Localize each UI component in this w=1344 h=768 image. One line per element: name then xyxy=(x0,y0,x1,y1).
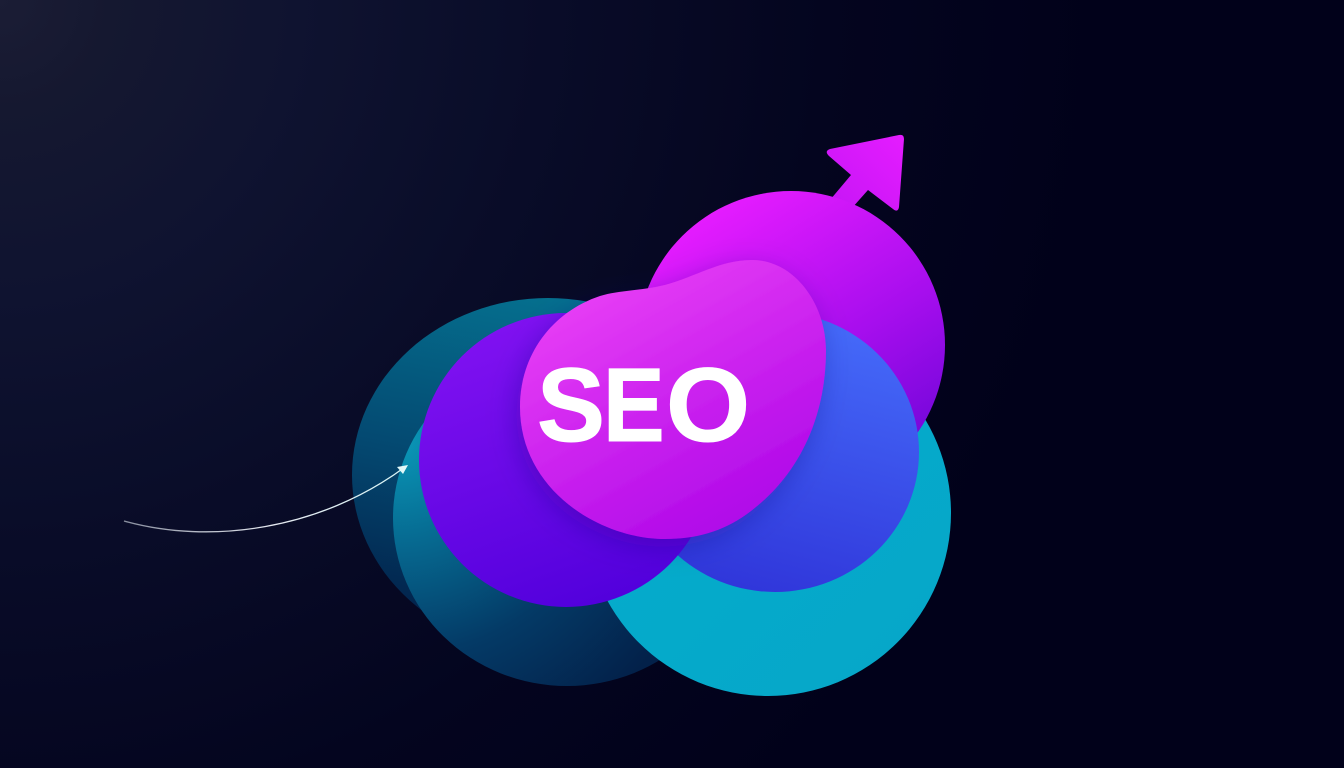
title: SEO xyxy=(537,345,750,464)
circle: violet left xyxy=(419,313,713,607)
circle: mid teal lower left xyxy=(393,350,741,686)
circle: dark teal back left xyxy=(352,298,744,652)
arrow: growth arrow xyxy=(827,135,904,211)
circle: blue right xyxy=(631,312,919,592)
circle: magenta upper right xyxy=(637,191,945,499)
blob: SEO shape xyxy=(520,260,826,539)
title: SEO: O xyxy=(666,346,750,464)
title: SEO: S xyxy=(537,346,605,463)
title: SEO: E xyxy=(603,345,665,463)
circle: cyan lower right xyxy=(585,330,951,696)
arrow: thin curved line xyxy=(124,465,408,532)
